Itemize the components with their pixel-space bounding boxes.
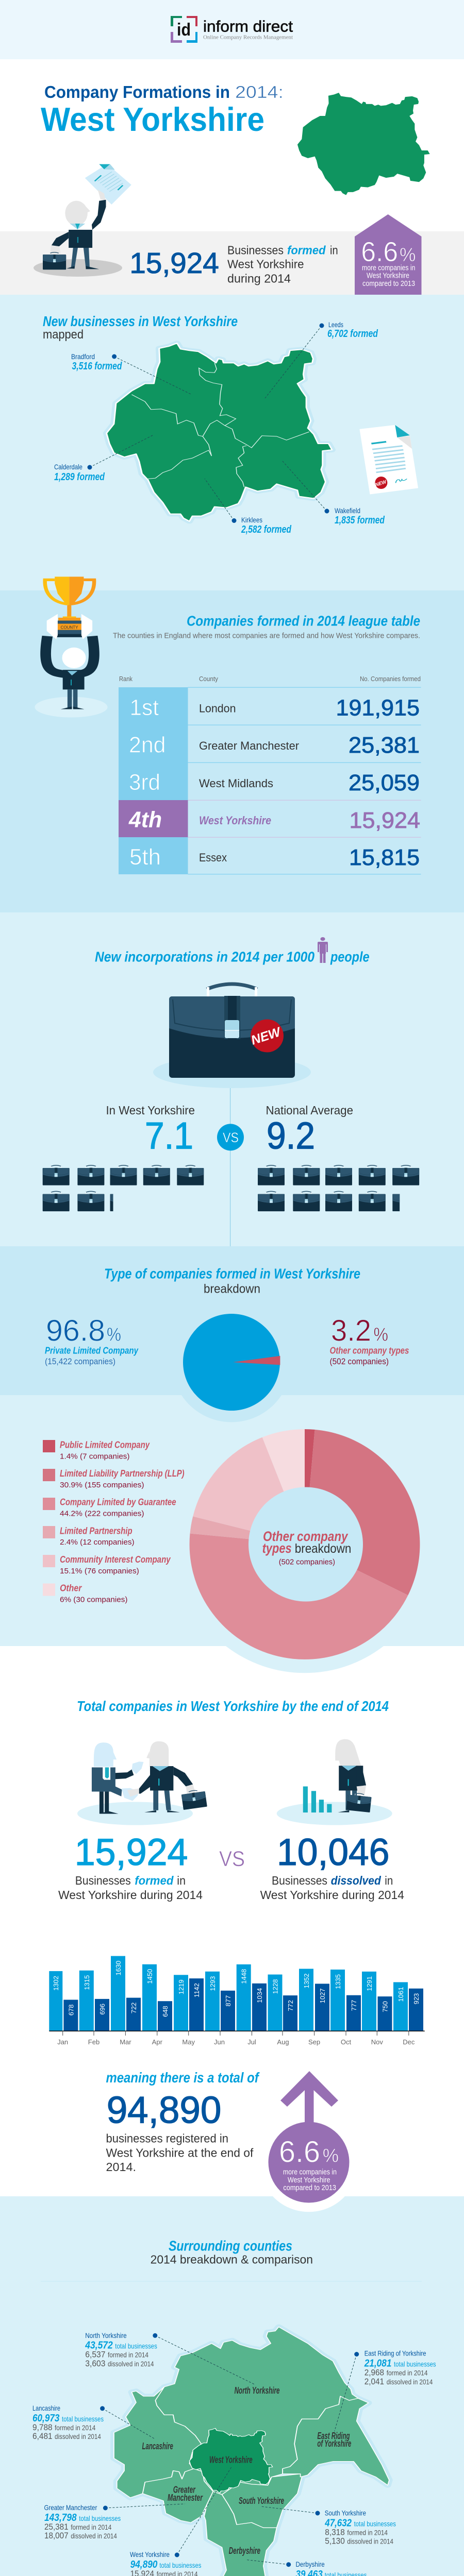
- comparison: incorporations per 1000: [106, 1088, 353, 1246]
- callout: 6.6% house: [355, 214, 422, 295]
- legend: other company types: Limited Liability Partnership (LLP): [60, 1468, 185, 1479]
- stat: businesses formed: [129, 243, 338, 285]
- heading: total companies: Total companies in West Yorkshire by the end of 2014: [77, 1698, 389, 1714]
- callout: East Riding of Yorkshire: [335, 2349, 436, 2431]
- table: companies formed: No. Companies formed: [360, 675, 421, 683]
- legend: other company types: 2.4% (12 companies): [60, 1538, 135, 1547]
- map callouts: districts: Kirklees: [241, 516, 262, 524]
- legend: other company types: 44.2% (222 companies): [60, 1510, 144, 1518]
- callout: Lancashire: Lancashire: [32, 2404, 60, 2412]
- map: surrounding counties: West Yorkshire: [209, 2454, 253, 2465]
- donut chart: other company types breakdown: (502 companies): [279, 1557, 335, 1566]
- donut chart: other company types breakdown: types: [262, 1540, 292, 1556]
- callout: North Yorkshire: [85, 2331, 255, 2384]
- heading: type of companies: breakdown: [204, 1282, 260, 1296]
- bar chart: monthly formed vs dissolved: 1335: [334, 1974, 342, 1989]
- bar chart: monthly formed vs dissolved: 722: [130, 2003, 138, 2013]
- comparison: formed vs dissolved: formed: [135, 1874, 174, 1887]
- comparison: formed vs dissolved: VS: [219, 1846, 245, 1871]
- illustration: man holding county trophy: [35, 577, 108, 717]
- comparison: formed vs dissolved: West Yorkshire during 2014: [58, 1888, 203, 1902]
- bar chart: monthly formed vs dissolved: 1450: [146, 1969, 154, 1984]
- callout: West Yorkshire: total businesses: [159, 2561, 201, 2569]
- callout: West Yorkshire: West Yorkshire: [130, 2550, 170, 2558]
- table: companies formed: West Midlands: [199, 777, 273, 790]
- callout: East Riding of Yorkshire: 2,041: [364, 2377, 384, 2386]
- donut chart: other company types breakdown: Other company: [263, 1529, 349, 1544]
- callout: West Yorkshire: 94,890: [130, 2559, 157, 2570]
- table: companies formed: 4th: [128, 807, 162, 833]
- callout: 6.6% house: more companies in: [362, 263, 415, 272]
- callout: East Riding of Yorkshire: total businesses: [394, 2360, 436, 2368]
- callout: Greater Manchester: total businesses: [79, 2514, 121, 2522]
- bar chart: monthly formed vs dissolved: 750: [382, 2001, 389, 2012]
- comparison: formed vs dissolved: dissolved: [331, 1874, 382, 1887]
- heading: surrounding counties: [41, 2238, 422, 2281]
- bar chart: monthly formed vs dissolved: 648: [161, 2006, 169, 2017]
- stat: businesses formed: in: [330, 243, 338, 257]
- stat: total businesses registered: meaning there is a total of: [106, 2070, 260, 2086]
- heading: surrounding counties: 2014 breakdown & comparison: [151, 2252, 313, 2266]
- stat: businesses formed: during 2014: [227, 272, 291, 285]
- bar chart: monthly formed vs dissolved: Nov: [371, 2038, 383, 2046]
- callout: Greater Manchester: 143,798: [44, 2512, 77, 2523]
- table: companies formed: Rank: [119, 675, 133, 683]
- bar chart: monthly formed vs dissolved: May: [182, 2038, 195, 2046]
- legend: other company types: [43, 1439, 185, 1604]
- table: companies formed: 15,924: [350, 808, 420, 833]
- callout: South Yorkshire: total businesses: [354, 2519, 396, 2528]
- bar chart: monthly formed vs dissolved: Mar: [120, 2038, 131, 2046]
- bar chart: monthly formed vs dissolved: 772: [287, 2000, 294, 2011]
- comparison: formed vs dissolved: Businesses: [272, 1874, 327, 1887]
- stat: private limited company: Private Limited Company: [45, 1346, 139, 1356]
- map callouts: districts: 1,289 formed: [54, 471, 105, 483]
- callout: North Yorkshire: 6,537: [85, 2349, 105, 2360]
- bar chart: monthly formed vs dissolved: Feb: [88, 2038, 100, 2046]
- bar chart: monthly formed vs dissolved: 1315: [83, 1975, 91, 1990]
- stat: total businesses registered: West Yorkshire at the end of: [106, 2146, 254, 2160]
- callout: Lancashire: 9,788: [32, 2422, 53, 2432]
- heading: new incorporations per 1000 people: people: [330, 949, 369, 965]
- legend: other company types: Limited Partnership: [60, 1526, 132, 1536]
- stat: private limited company: 96.8: [46, 1314, 105, 1347]
- callout: 6.6% house: West Yorkshire: [367, 272, 409, 280]
- map: surrounding counties: Greater: [173, 2485, 196, 2495]
- map callouts: districts: 6,702 formed: [327, 328, 378, 340]
- map: surrounding counties: Manchester: [168, 2493, 203, 2503]
- legend: other company types: 1.4% (7 companies): [60, 1452, 130, 1461]
- stat: other company types: [330, 1314, 409, 1366]
- bar chart: monthly formed vs dissolved: 1293: [209, 1976, 217, 1991]
- icon: new company document: NEW: [374, 479, 388, 488]
- legend: other company types: Public Limited Company: [60, 1439, 150, 1450]
- bar chart: monthly formed vs dissolved: Sep: [308, 2038, 320, 2046]
- icon: large briefcase with NEW badge: NEW: [249, 1024, 284, 1048]
- illustration: man holding county trophy: COUNTY: [61, 625, 78, 630]
- table: companies formed: 191,915: [336, 696, 420, 721]
- callout: South Yorkshire: 47,632: [324, 2517, 352, 2529]
- map callouts: districts: 3,516 formed: [72, 361, 122, 372]
- legend: other company types: Community Interest Company: [60, 1554, 171, 1565]
- header logo: id: [177, 20, 191, 40]
- bar chart: monthly formed vs dissolved: Jun: [214, 2038, 225, 2046]
- callout: Lancashire: 6,481: [32, 2431, 53, 2441]
- callout: Derbyshire: Derbyshire: [296, 2560, 325, 2568]
- callout: South Yorkshire: 5,130: [325, 2536, 345, 2546]
- callout: Lancashire: total businesses: [62, 2415, 104, 2423]
- map: surrounding counties: [114, 2327, 389, 2576]
- stat: other company types: %: [373, 1324, 388, 1345]
- heading: surrounding counties: Surrounding counties: [169, 2238, 292, 2254]
- legend: other company types: 15.1% (76 companies): [60, 1567, 139, 1575]
- callout: Greater Manchester: [44, 2503, 185, 2540]
- bar chart: monthly formed vs dissolved: Oct: [341, 2038, 351, 2046]
- table: companies formed: West Yorkshire: [199, 814, 271, 827]
- bar chart: monthly formed vs dissolved: 1291: [366, 1976, 373, 1991]
- callout: South Yorkshire: formed in 2014: [347, 2529, 388, 2536]
- stat: total businesses registered: businesses registered in: [106, 2132, 228, 2145]
- table: companies formed: 15,815: [349, 845, 420, 870]
- stat: other company types: (502 companies): [330, 1357, 389, 1366]
- bar chart: monthly formed vs dissolved: 923: [412, 1993, 420, 2004]
- comparison: formed vs dissolved: 15,924: [75, 1832, 188, 1873]
- pictogram: West Yorkshire 7.1 briefcases: [43, 1165, 204, 1211]
- stat: businesses formed: Businesses: [227, 243, 284, 257]
- legend: other company types: 30.9% (155 companies): [60, 1481, 144, 1489]
- bar chart: monthly formed vs dissolved: 1027: [319, 1988, 326, 2003]
- stat: businesses formed: 15,924: [129, 247, 219, 280]
- heading: type of companies: Type of companies formed in West Yorkshire: [104, 1265, 360, 1281]
- comparison: formed vs dissolved: West Yorkshire during 2014: [260, 1888, 404, 1902]
- bar chart: monthly formed vs dissolved: Aug: [277, 2038, 289, 2046]
- callout: South Yorkshire: South Yorkshire: [325, 2509, 366, 2517]
- pie chart: private limited vs other: [181, 1314, 281, 1422]
- callout: East Riding of Yorkshire: dissolved in 2014: [387, 2378, 433, 2386]
- callout: growth arrow and circle: more companies in: [283, 2168, 337, 2177]
- title: West Yorkshire: [41, 100, 264, 138]
- callout: growth arrow and circle: West Yorkshire: [288, 2176, 330, 2184]
- comparison: incorporations per 1000: 7.1: [145, 1115, 193, 1157]
- bar chart: monthly formed vs dissolved: 877: [224, 1995, 232, 2007]
- stat: private limited company: %: [107, 1324, 121, 1345]
- table: companies formed: 1st: [130, 695, 159, 720]
- bar chart: monthly formed vs dissolved: 678: [67, 2004, 75, 2015]
- title: [41, 82, 284, 138]
- map: surrounding counties: Lancashire: [142, 2441, 173, 2451]
- callout: North Yorkshire: 43,572: [85, 2340, 113, 2351]
- heading: companies formed league table: Companies formed in 2014 league table: [187, 613, 420, 629]
- callout: North Yorkshire: dissolved in 2014: [108, 2360, 154, 2368]
- table: companies formed: 25,381: [349, 733, 420, 758]
- map: surrounding counties: East Riding: [317, 2431, 350, 2441]
- callout: East Riding of Yorkshire: 21,081: [364, 2358, 392, 2369]
- callout: Derbyshire: [246, 2560, 367, 2576]
- map silhouette: West Yorkshire: [297, 93, 430, 195]
- pictogram: national 9.2 briefcases: [258, 1165, 419, 1211]
- stat: other company types: 3.2: [331, 1314, 371, 1347]
- table: companies formed: [119, 675, 421, 875]
- callout: growth arrow and circle: compared to 2013: [283, 2183, 336, 2192]
- bar chart: monthly formed vs dissolved: 1448: [240, 1969, 248, 1984]
- map: surrounding counties: of Yorkshire: [317, 2438, 351, 2449]
- table: companies formed: 25,059: [349, 770, 420, 795]
- comparison: formed vs dissolved: [58, 1832, 404, 1902]
- callout: North Yorkshire: formed in 2014: [108, 2351, 148, 2359]
- table: companies formed: London: [199, 702, 236, 715]
- map callouts: districts: [54, 320, 385, 535]
- callout: South Yorkshire: [261, 2506, 396, 2546]
- stat: businesses formed: West Yorkshire: [227, 258, 304, 271]
- callout: Greater Manchester: Greater Manchester: [44, 2503, 97, 2512]
- callout: growth arrow and circle: [268, 2071, 350, 2212]
- illustration: man with falling bar chart: [277, 1739, 392, 1825]
- callout: North Yorkshire: 3,603: [85, 2359, 105, 2368]
- callout: 6.6% house: compared to 2013: [362, 279, 415, 288]
- bar chart: monthly formed vs dissolved: 1630: [114, 1961, 122, 1976]
- bar chart: monthly formed vs dissolved: 1219: [177, 1979, 185, 1994]
- map callouts: districts: 2,582 formed: [241, 524, 292, 535]
- bar chart: monthly formed vs dissolved: 1061: [397, 1987, 405, 2002]
- stat: total businesses registered: [106, 2070, 260, 2174]
- stat: private limited company: [45, 1314, 139, 1366]
- illustration: man holding document and briefcase: [34, 164, 131, 277]
- map callouts: districts: Leeds: [328, 320, 343, 329]
- title: 2014:: [235, 82, 284, 101]
- callout: Lancashire: formed in 2014: [55, 2424, 96, 2432]
- map: surrounding counties: Derbyshire: [229, 2546, 260, 2556]
- donut chart: other company types breakdown: [190, 1429, 420, 1673]
- stat: total businesses registered: 2014.: [106, 2160, 136, 2174]
- comparison: incorporations per 1000: National Average: [266, 1104, 353, 1117]
- title: Company Formations in: [44, 82, 230, 101]
- bar chart: monthly formed vs dissolved: 1228: [271, 1979, 279, 1994]
- callout: Greater Manchester: dissolved in 2014: [71, 2532, 117, 2540]
- callout: East Riding of Yorkshire: East Riding of Yorkshire: [364, 2349, 426, 2358]
- callout: North Yorkshire: total businesses: [115, 2342, 157, 2350]
- heading: new businesses mapped: [43, 313, 238, 342]
- stat: private limited company: (15,422 companies): [45, 1357, 115, 1366]
- bar chart: monthly formed vs dissolved: 1142: [193, 1983, 201, 1997]
- comparison: incorporations per 1000: In West Yorkshire: [106, 1104, 195, 1117]
- map callouts: districts: Bradford: [71, 352, 95, 361]
- callout: South Yorkshire: dissolved in 2014: [347, 2538, 393, 2546]
- icon: new company document: [359, 425, 418, 494]
- table: companies formed: County: [199, 675, 219, 683]
- callout: West Yorkshire: [130, 2467, 231, 2576]
- header logo: inform direct: [203, 18, 293, 35]
- callout: East Riding of Yorkshire: formed in 2014: [387, 2369, 428, 2377]
- bar chart: monthly formed vs dissolved: 1034: [256, 1988, 263, 2003]
- legend: other company types: Other: [60, 1583, 82, 1593]
- table: companies formed: Greater Manchester: [199, 739, 299, 752]
- callout: 6.6% house: 6.6: [361, 236, 398, 267]
- bar chart: monthly formed vs dissolved: Jan: [57, 2038, 68, 2046]
- donut chart: other company types breakdown: breakdown: [295, 1541, 351, 1556]
- map callouts: districts: Calderdale: [54, 463, 82, 471]
- header logo: [171, 16, 293, 43]
- legend: other company types: 6% (30 companies): [60, 1595, 127, 1604]
- map callouts: districts: Wakefield: [335, 506, 360, 515]
- table: companies formed: 3rd: [129, 770, 160, 795]
- table: companies formed: 5th: [129, 844, 161, 870]
- table: companies formed: Essex: [199, 851, 227, 864]
- bar chart: monthly formed vs dissolved: Apr: [152, 2038, 163, 2046]
- callout: growth arrow and circle: 6.6: [279, 2136, 320, 2169]
- callout: South Yorkshire: 8,318: [325, 2527, 345, 2537]
- comparison: formed vs dissolved: in: [385, 1874, 393, 1887]
- stat: total businesses registered: 94,890: [107, 2090, 221, 2131]
- callout: Lancashire: 60,973: [32, 2413, 59, 2424]
- bar chart: monthly formed vs dissolved: 777: [350, 2000, 358, 2011]
- stat: other company types: Other company types: [330, 1346, 409, 1356]
- comparison: formed vs dissolved: Businesses: [75, 1874, 131, 1887]
- callout: North Yorkshire: North Yorkshire: [85, 2331, 127, 2340]
- comparison: incorporations per 1000: VS: [223, 1130, 239, 1145]
- callout: growth arrow and circle: %: [323, 2145, 339, 2166]
- callout: Lancashire: [32, 2404, 155, 2441]
- callout: 6.6% house: %: [400, 244, 416, 265]
- callout: Greater Manchester: 25,381: [44, 2522, 69, 2532]
- stat: businesses formed: formed: [287, 243, 326, 257]
- callout: Greater Manchester: formed in 2014: [71, 2523, 112, 2531]
- map callouts: districts: 1,835 formed: [335, 515, 385, 526]
- map: surrounding counties: North Yorkshire: [235, 2385, 279, 2396]
- map: West Yorkshire districts: [107, 343, 332, 521]
- heading: new incorporations per 1000 people: New incorporations in 2014 per 1000: [95, 949, 314, 965]
- comparison: incorporations per 1000: 9.2: [267, 1115, 315, 1157]
- bar chart: monthly formed vs dissolved: 696: [98, 2004, 106, 2015]
- heading: new incorporations per 1000 people: [95, 937, 369, 965]
- heading: companies formed league table: [113, 613, 420, 640]
- heading: new businesses mapped: mapped: [43, 328, 84, 342]
- callout: Greater Manchester: 18,007: [44, 2531, 69, 2540]
- header logo: Online Company Records Management: [203, 34, 293, 40]
- bar chart: monthly formed vs dissolved: [49, 1956, 425, 2046]
- heading: new businesses mapped: New businesses in West Yorkshire: [43, 313, 238, 329]
- callout: East Riding of Yorkshire: 2,968: [364, 2368, 384, 2377]
- illustration: two men shaking hands: [77, 1741, 207, 1825]
- table: companies formed: 2nd: [129, 733, 166, 757]
- heading: type of companies: [104, 1265, 360, 1296]
- bar chart: monthly formed vs dissolved: Jul: [247, 2038, 256, 2046]
- bar chart: monthly formed vs dissolved: 1302: [52, 1976, 60, 1991]
- map: surrounding counties: South Yorkshire: [239, 2496, 284, 2506]
- icon: large briefcase with NEW badge: [153, 984, 311, 1088]
- comparison: formed vs dissolved: in: [177, 1874, 186, 1887]
- legend: other company types: Company Limited by Guarantee: [60, 1497, 176, 1507]
- bar chart: monthly formed vs dissolved: 1352: [303, 1973, 310, 1988]
- callout: Lancashire: dissolved in 2014: [55, 2433, 101, 2441]
- bar chart: monthly formed vs dissolved: Dec: [403, 2038, 415, 2046]
- comparison: formed vs dissolved: 10,046: [277, 1832, 390, 1873]
- heading: companies formed league table: The counties in England where most companies are formed and how West Yorkshire compares.: [113, 632, 420, 640]
